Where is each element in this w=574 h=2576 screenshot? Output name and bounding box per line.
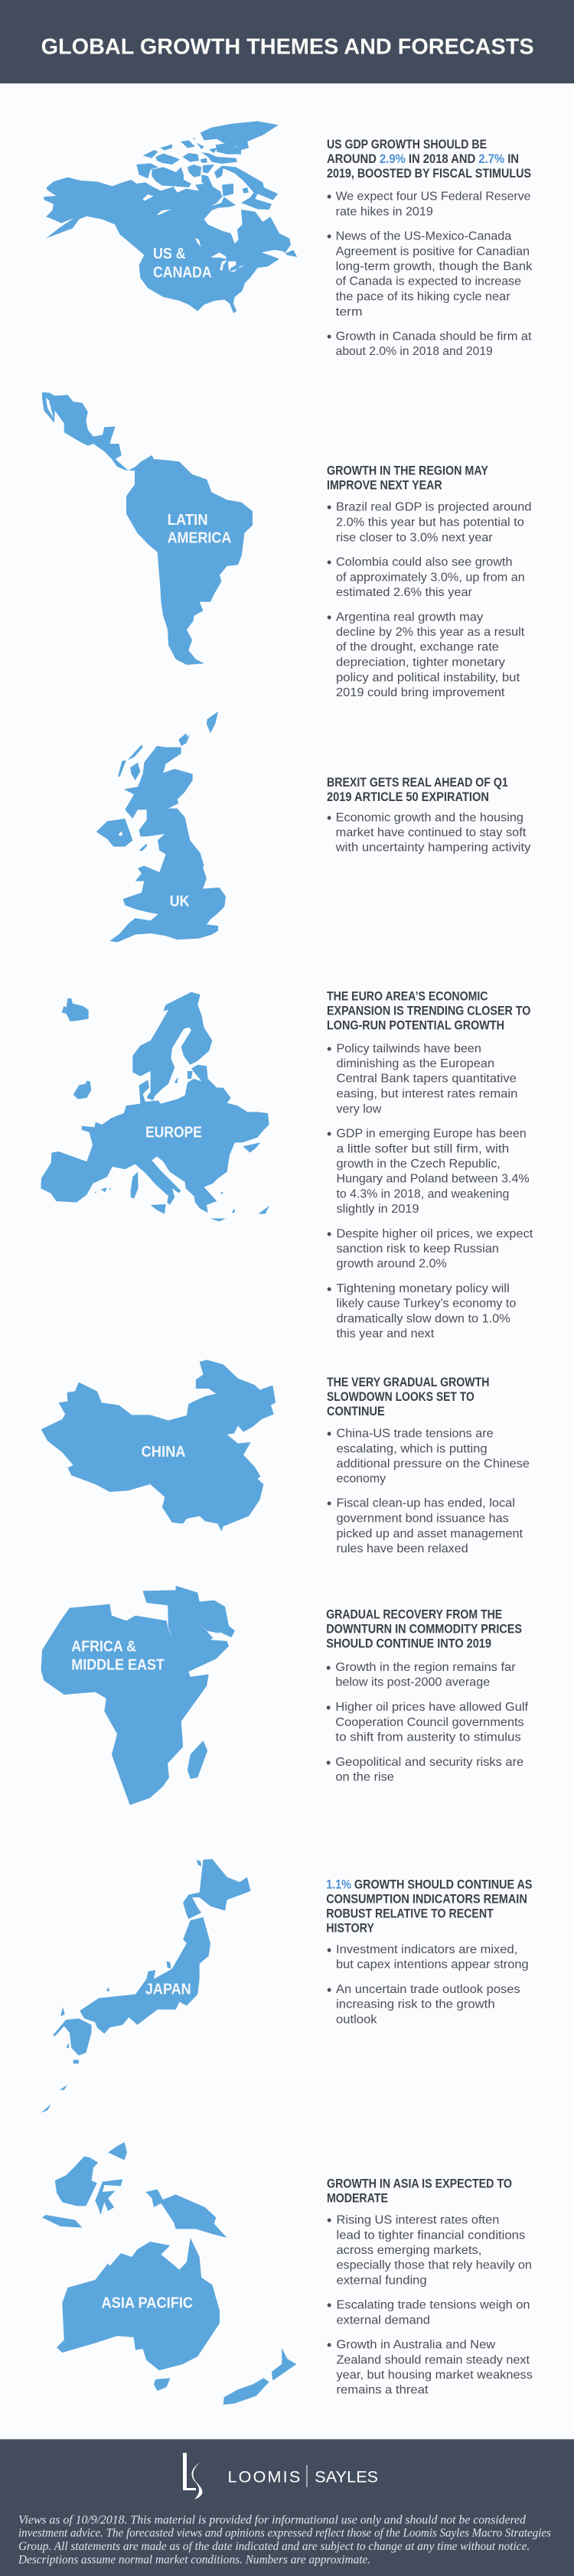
bullet list: • [327, 1281, 331, 1297]
panel: Europe [41, 989, 533, 1340]
bullet list: Hungary and Poland between 3.4% [337, 1173, 530, 1186]
bullet list: Central Bank tapers quantitative [337, 1073, 517, 1086]
bullet list: Economic growth and the housing [336, 811, 523, 824]
bullet list [326, 1660, 529, 1784]
bullet list: to 4.3% in 2018, and weakening [337, 1187, 509, 1200]
bullet list: Zealand should remain steady next [337, 2353, 530, 2366]
region label: EUROPE [145, 1125, 202, 1141]
heading: 2019, BOOSTED BY FISCAL STIMULUS [327, 167, 531, 181]
bullet list [327, 189, 533, 358]
bullet list: on the rise [335, 1771, 394, 1784]
logo: Loomis Sayles [183, 2453, 378, 2499]
bullet list: We expect four US Federal Reserve [336, 191, 531, 204]
region label: MIDDLE EAST [71, 1656, 165, 1673]
bullet list: • [327, 1496, 331, 1511]
bullet list: Agreement is positive for Canadian [336, 245, 530, 258]
bullet list: Growth in the region remains far [335, 1661, 516, 1674]
title banner: GLOBAL GROWTH THEMES AND FORECASTS [41, 35, 534, 60]
disclaimer: investment advice. The forecasted views and opinions expressed reflect those of the Loomis Sayles Macro Strategies [18, 2527, 551, 2540]
map: Japan [41, 1859, 251, 2113]
bullet list: • [327, 229, 331, 244]
heading: THE EURO AREA’S ECONOMIC [327, 989, 488, 1003]
bullet list: external funding [337, 2274, 427, 2287]
heading: GROWTH IN ASIA IS EXPECTED TO [327, 2177, 512, 2190]
disclaimer [18, 2513, 551, 2566]
bullet list: • [327, 1126, 331, 1141]
region label [153, 246, 212, 281]
region label: UK [170, 893, 190, 910]
bullet list: the pace of its hiking cycle near [336, 291, 510, 304]
bullet list: Policy tailwinds have been [337, 1042, 481, 1055]
bullet list: rules have been relaxed [337, 1542, 468, 1555]
bullet list: 2019 could bring improvement [336, 686, 505, 699]
bullet list: • [327, 1943, 331, 1958]
bullet list: China-US trade tensions are [337, 1428, 494, 1441]
bullet list: growth around 2.0% [337, 1258, 447, 1271]
heading: AROUND 2.9% IN 2018 AND 2.7% IN [327, 152, 519, 166]
logo: Loomis Sayles: LOOMIS [228, 2467, 300, 2486]
map: Europe [41, 992, 269, 1222]
region label: CANADA [153, 264, 212, 281]
bullet list: Cooperation Council governments [335, 1716, 524, 1729]
bullet list: depreciation, tighter monetary [336, 656, 505, 669]
bullet list: especially those that rely heavily on [337, 2259, 532, 2272]
bullet list: a little softer but still firm, with [337, 1142, 509, 1155]
bullet list: government bond issuance has [337, 1513, 509, 1526]
bullet list: below its post-2000 average [335, 1676, 490, 1689]
bullet list: additional pressure on the Chinese [337, 1457, 530, 1470]
bullet list: increasing risk to the growth [336, 1998, 495, 2011]
logo: Loomis Sayles: SAYLES [315, 2467, 378, 2486]
bullet list: Higher oil prices have allowed Gulf [335, 1701, 529, 1714]
title banner [0, 0, 574, 83]
heading: SHOULD CONTINUE INTO 2019 [326, 1636, 491, 1650]
bullet list: rate hikes in 2019 [336, 205, 433, 218]
bullet list: 2.0% this year but has potential to [336, 516, 524, 529]
bullet list: Rising US interest rates often [337, 2213, 499, 2226]
bullet list [327, 2213, 533, 2396]
heading: LONG-RUN POTENTIAL GROWTH [327, 1018, 504, 1032]
bullet list: Escalating trade tensions weigh on [337, 2299, 530, 2312]
bullet list [327, 1943, 529, 2026]
map: North America [44, 121, 297, 313]
region label: ASIA PACIFIC [101, 2294, 193, 2311]
region label: LATIN [168, 512, 208, 529]
heading: 1.1% GROWTH SHOULD CONTINUE AS [326, 1877, 533, 1891]
bullet list: likely cause Turkey’s economy to [337, 1298, 517, 1311]
bullet list [327, 810, 531, 855]
heading: GROWTH IN THE REGION MAY [327, 464, 488, 477]
heading [327, 464, 488, 492]
bullet list: slightly in 2019 [337, 1203, 419, 1216]
bullet list: policy and political instability, but [336, 671, 520, 684]
bullet list: across emerging markets, [337, 2244, 481, 2257]
heading [327, 1376, 489, 1418]
region label: AFRICA & [71, 1638, 136, 1655]
heading: GRADUAL RECOVERY FROM THE [326, 1607, 502, 1621]
bullet list: Tightening monetary policy will [337, 1282, 510, 1295]
bullet list [327, 1426, 530, 1555]
bullet list: external demand [337, 2314, 430, 2327]
map: United Kingdom [96, 712, 226, 943]
bullet list [327, 1041, 533, 1340]
bullet list: Geopolitical and security risks are [335, 1756, 523, 1769]
bullet list: with uncertainty hampering activity [335, 842, 531, 855]
heading [326, 1607, 522, 1650]
heading: 2019 ARTICLE 50 EXPIRATION [327, 790, 489, 804]
bullet list: of the drought, exchange rate [336, 641, 499, 654]
panel: Latin America [42, 392, 531, 699]
bullet list: year, but housing market weakness [337, 2369, 533, 2382]
heading [327, 989, 531, 1032]
bullet list: escalating, which is putting [337, 1442, 488, 1455]
panel: UK [96, 712, 531, 943]
bullet list: sanction risk to keep Russian [337, 1242, 499, 1255]
bullet list: long-term growth, though the Bank [336, 260, 533, 273]
bullet list: estimated 2.6% this year [336, 586, 472, 599]
bullet list: • [326, 1755, 331, 1770]
disclaimer: Group. All statements are made as of the date indicated and are subject to change at any time without notice. [18, 2540, 530, 2553]
bullet list: dramatically slow down to 1.0% [337, 1312, 510, 1325]
bullet list: Brazil real GDP is projected around [336, 501, 531, 514]
bullet list: • [327, 500, 331, 515]
bullet list: economy [337, 1473, 386, 1486]
region label [71, 1638, 165, 1673]
region label [168, 512, 231, 546]
bullet list: • [327, 2213, 331, 2228]
bullet list: Argentina real growth may [336, 611, 483, 624]
disclaimer: Descriptions assume normal market conditions. Numbers are approximate. [18, 2553, 370, 2566]
bullet list: decline by 2% this year as a result [336, 626, 525, 639]
map: Africa and Middle East [41, 1586, 235, 1805]
heading [326, 1877, 533, 1935]
bullet list [327, 500, 531, 699]
bullet list: An uncertain trade outlook poses [336, 1983, 520, 1996]
bullet list: • [326, 1660, 331, 1676]
heading: EXPANSION IS TRENDING CLOSER TO [327, 1004, 531, 1018]
bullet list: • [327, 1041, 331, 1057]
bullet list: Colombia could also see growth [336, 555, 513, 568]
panel: China [41, 1360, 530, 1555]
bullet list: Growth in Canada should be firm at [336, 330, 532, 343]
heading: HISTORY [326, 1921, 374, 1935]
map: China [41, 1360, 276, 1532]
panel: Japan [41, 1859, 533, 2113]
region label: CHINA [142, 1444, 185, 1461]
bullet list: • [327, 610, 331, 625]
region label: AMERICA [168, 529, 231, 546]
heading: US GDP GROWTH SHOULD BE [327, 138, 487, 151]
heading: DOWNTURN IN COMMODITY PRICES [326, 1622, 522, 1636]
heading: MODERATE [327, 2191, 388, 2205]
bullet list: • [327, 1226, 331, 1242]
bullet list: Despite higher oil prices, we expect [337, 1227, 533, 1240]
bullet list: to shift from austerity to stimulus [335, 1731, 521, 1744]
bullet list: • [327, 189, 331, 204]
heading: BREXIT GETS REAL AHEAD OF Q1 [327, 776, 508, 790]
bullet list: remains a threat [337, 2383, 429, 2396]
heading: THE VERY GRADUAL GROWTH [327, 1376, 489, 1389]
bullet list: • [327, 1426, 331, 1441]
bullet list: • [327, 329, 331, 344]
disclaimer: Views as of 10/9/2018. This material is provided for informational use only and should not be considered [18, 2513, 526, 2526]
bullet list: but capex intentions appear strong [336, 1959, 529, 1972]
heading: SLOWDOWN LOOKS SET TO [327, 1390, 475, 1404]
bullet list: GDP in emerging Europe has been [337, 1128, 527, 1141]
heading [327, 2177, 512, 2205]
bullet list: • [327, 1982, 331, 1998]
heading: ROBUST RELATIVE TO RECENT [326, 1907, 494, 1920]
bullet list: lead to tighter financial conditions [337, 2229, 526, 2242]
bullet list: Fiscal clean-up has ended, local [337, 1497, 515, 1510]
map: Latin America [42, 392, 253, 665]
bullet list: of Canada is expected to increase [336, 275, 521, 288]
heading [327, 138, 531, 181]
panel: Africa & Middle East [41, 1586, 529, 1805]
panel: US & Canada [44, 121, 533, 358]
bullet list: Growth in Australia and New [337, 2338, 496, 2351]
bullet list: • [327, 555, 331, 570]
region label: JAPAN [145, 1981, 191, 1998]
bullet list: picked up and asset management [337, 1527, 523, 1540]
bullet list: market have continued to stay soft [336, 826, 527, 839]
heading: CONSUMPTION INDICATORS REMAIN [326, 1892, 527, 1906]
map: Asia Pacific [42, 2142, 296, 2405]
bullet list: growth in the Czech Republic, [337, 1158, 501, 1171]
bullet list: rise closer to 3.0% next year [336, 531, 493, 544]
bullet list: outlook [336, 2013, 377, 2026]
panel: Asia Pacific [42, 2142, 533, 2405]
bullet list: News of the US-Mexico-Canada [336, 230, 512, 243]
bullet list: • [327, 2298, 331, 2313]
heading: CONTINUE [327, 1405, 385, 1418]
bullet list: • [326, 1700, 331, 1715]
bullet list: about 2.0% in 2018 and 2019 [336, 345, 493, 358]
bullet list: term [336, 305, 363, 318]
heading: IMPROVE NEXT YEAR [327, 478, 442, 492]
bullet list: this year and next [337, 1327, 435, 1340]
bullet list: • [327, 2337, 331, 2353]
bullet list: diminishing as the European [337, 1057, 494, 1070]
bullet list: easing, but interest rates remain [337, 1088, 517, 1101]
region label: US & [153, 246, 186, 262]
bullet list: of approximately 3.0%, up from an [336, 571, 525, 584]
bullet list: very low [337, 1102, 382, 1115]
bullet list: Investment indicators are mixed, [336, 1943, 517, 1956]
bullet list: • [327, 810, 331, 826]
heading [327, 776, 508, 804]
footer [0, 2439, 574, 2576]
